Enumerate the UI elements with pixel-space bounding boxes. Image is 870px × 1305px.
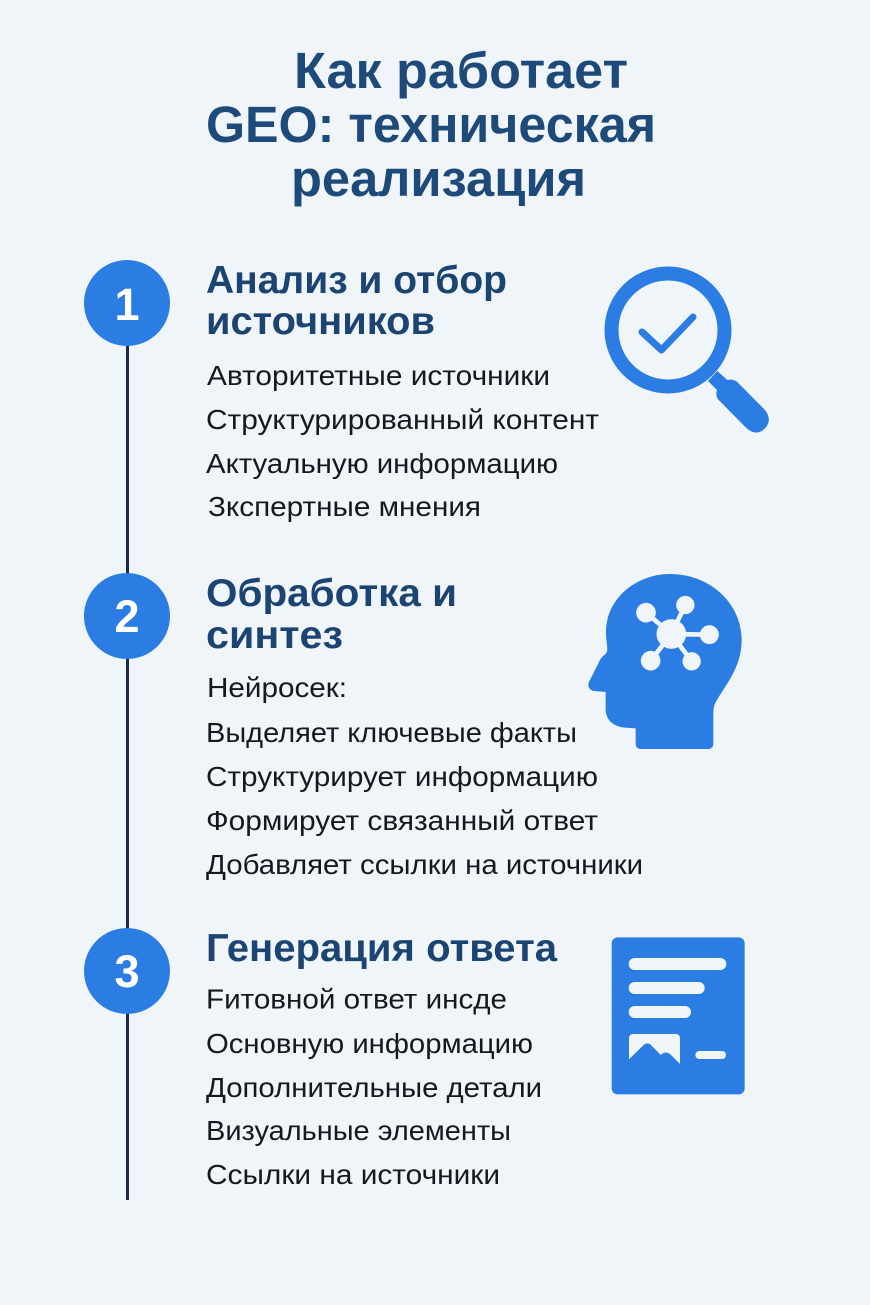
step 1 heading: Анализ и отбор [206,259,507,302]
step 2 list: Формирует связанный ответ [206,805,598,836]
step 1 list: Зкспертные мнения [208,491,481,522]
step 2 heading [206,572,457,657]
step 2 number badge: 2 [114,591,140,642]
step 1 heading: источников [206,300,435,343]
step 2 list [206,672,643,880]
panel: step 1 [84,259,769,522]
step 3 number badge [84,928,170,1014]
step 2 number badge [84,573,170,659]
title [206,42,656,207]
icon: document [612,937,745,1094]
step 3 list: Дополнительные детали [206,1072,542,1103]
title: реализация [291,150,586,207]
step 1 list: Актуальную информацию [206,448,558,479]
title: GEO: техническая [206,96,656,153]
panel: step 2 [84,572,742,880]
step 1 list: Структурированный контент [206,404,599,435]
step 1 list: Авторитетные источники [207,360,550,391]
step 1 number badge: 1 [114,279,140,330]
step 3 list: Визуальные элементы [206,1115,511,1146]
timeline line [126,340,129,1200]
panel: step 3 [84,927,745,1190]
step 2 list: Добавляет ссылки на источники [206,849,643,880]
step 2 list: Выделяет ключевые факты [206,717,577,748]
step 3 list [206,984,542,1190]
step 2 heading: синтез [206,614,343,657]
step 3 list: Ссылки на источники [206,1159,500,1190]
step 2 list: Нейросек: [207,672,347,703]
step 3 number badge: 3 [114,946,140,997]
step 3 heading: Генерация ответа [206,927,557,970]
step 3 list: Fитовной ответ инсде [206,984,507,1014]
title: Как работает [294,42,628,99]
icon: head with network [588,574,742,749]
step 1 number badge [84,260,170,346]
icon: magnifying glass with check [612,274,769,432]
step 3 list: Основную информацию [206,1028,533,1059]
step 1 heading [206,259,507,343]
step 2 list: Структурирует информацию [206,761,598,792]
step 2 heading: Обработка и [206,572,457,615]
step 1 list [206,360,599,522]
